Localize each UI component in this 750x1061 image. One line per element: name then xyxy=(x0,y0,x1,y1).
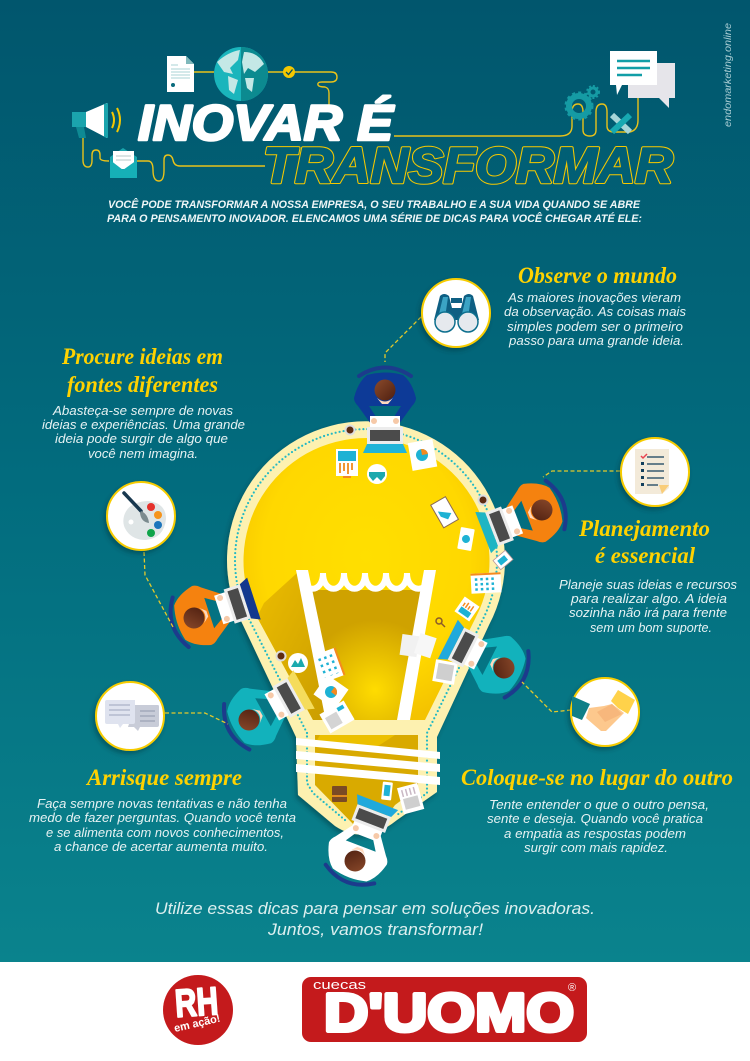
body text: passo para uma grande ideia. xyxy=(508,334,684,348)
phone bottom xyxy=(381,782,393,800)
body text xyxy=(29,797,296,854)
logo: cuecas D'UOMO: D'UOMO xyxy=(324,983,574,1043)
wallet xyxy=(332,786,347,802)
body text: Abasteça-se sempre de novas xyxy=(52,404,234,418)
body text: medo de fazer perguntas. Quando você tenta xyxy=(29,811,296,825)
person: teal right xyxy=(434,612,538,706)
closing message: Utilize essas dicas para pensar em soluções inovadoras. xyxy=(155,900,595,918)
small tablet xyxy=(493,550,513,570)
icon: globe xyxy=(214,47,268,101)
person: white bottom xyxy=(318,791,407,893)
round chart left xyxy=(288,653,308,673)
icon: envelope xyxy=(110,148,137,178)
body text: As maiores inovações vieram xyxy=(507,291,681,305)
body text: sozinha não irá para frente xyxy=(569,606,727,620)
closing message xyxy=(155,900,595,939)
body text: surgir com mais rapidez. xyxy=(524,841,668,855)
section: planejamento xyxy=(559,516,738,635)
chart document xyxy=(336,449,358,478)
connector: checklist xyxy=(543,471,620,477)
logo: RH em ação: em ação! xyxy=(173,1013,221,1035)
header wires xyxy=(83,72,638,181)
heading: Procure ideias em xyxy=(61,344,223,369)
connector: palette xyxy=(144,552,173,627)
icon: binoculars xyxy=(422,279,490,347)
coffee cup right xyxy=(478,494,488,506)
logo: cuecas D'UOMO: ® xyxy=(568,982,576,994)
vertical site credit: endomarketing.online xyxy=(723,23,734,127)
table items xyxy=(276,424,513,814)
body text: para realizar algo. A ideia xyxy=(570,592,727,606)
body text xyxy=(487,798,709,855)
phone xyxy=(457,527,475,551)
pie document xyxy=(408,439,437,471)
logo: RH em ação: RH xyxy=(174,980,220,1026)
heading: Observe o mundo xyxy=(518,263,677,288)
filament scallops xyxy=(302,573,430,589)
body text xyxy=(559,578,738,635)
tablet xyxy=(431,497,458,528)
filament interior xyxy=(308,590,424,720)
icon: check badge xyxy=(283,66,295,78)
body text: sem um bom suporte. xyxy=(590,621,712,635)
footer band xyxy=(0,962,750,1061)
lower paper right xyxy=(432,659,458,685)
body text xyxy=(504,291,687,348)
bulb outer glass xyxy=(227,421,505,835)
body text: você nem imagina. xyxy=(88,447,198,461)
filament shadow xyxy=(257,573,330,720)
dotted outline xyxy=(235,429,497,820)
heading: Arrisque sempre xyxy=(85,765,242,790)
closing message: Juntos, vamos transformar! xyxy=(267,921,483,939)
heading: é essencial xyxy=(595,543,696,568)
paper bottom xyxy=(397,783,424,814)
person: orange right xyxy=(472,473,574,562)
connector: handshake xyxy=(522,682,571,712)
icon: checklist xyxy=(621,438,689,506)
body text: Planeje suas ideias e recursos xyxy=(559,578,738,592)
body text: a empatia as respostas podem xyxy=(504,827,686,841)
intro text: VOCÊ PODE TRANSFORMAR A NOSSA EMPRESA, O SEU TRABALHO E A SUA VIDA QUANDO SE ABRE xyxy=(108,198,640,211)
heading: Coloque-se no lugar do outro xyxy=(461,765,733,790)
icon: chat bubbles xyxy=(610,51,675,108)
person: orange left xyxy=(163,569,263,654)
bulb base interior xyxy=(315,735,418,826)
body text: ideia pode surgir de algo que xyxy=(55,432,228,446)
icon: document xyxy=(167,56,194,92)
logo: RH em ação xyxy=(163,975,233,1045)
connector: binoculars xyxy=(385,317,421,362)
intro text: PARA O PENSAMENTO INOVADOR. ELENCAMOS UMA SÉRIE DE DICAS PARA VOCÊ CHEGAR ATÉ ELE: xyxy=(107,212,642,225)
body text: ideias e experiências. Uma grande xyxy=(42,418,245,432)
heading: fontes diferentes xyxy=(67,372,218,397)
section: procure ideias xyxy=(42,344,245,461)
icon: handshake xyxy=(571,678,639,746)
person: blue top xyxy=(354,368,416,453)
coffee cup left xyxy=(276,650,286,662)
swatch document xyxy=(470,572,502,594)
tilted bar document xyxy=(454,596,480,622)
coffee cup top xyxy=(344,424,356,436)
icon: palette xyxy=(107,482,175,550)
body text: a chance de acertar aumenta muito. xyxy=(54,840,268,854)
body text: Faça sempre novas tentativas e não tenha xyxy=(37,797,287,811)
heading: Planejamento xyxy=(578,516,710,541)
connector: chat xyxy=(165,713,228,724)
light bulb xyxy=(227,421,505,835)
paper left xyxy=(319,700,355,734)
body text: Tente entender o que o outro pensa, xyxy=(489,798,709,812)
person: teal left xyxy=(214,662,319,758)
section: coloque-se no lugar do outro xyxy=(461,765,733,855)
pie paper left xyxy=(313,675,349,709)
body text xyxy=(42,404,245,461)
round chart xyxy=(367,464,387,484)
bulb inner yellow xyxy=(243,438,490,720)
heading xyxy=(578,516,710,568)
section: observe o mundo xyxy=(504,263,687,348)
heading xyxy=(61,344,223,397)
open papers xyxy=(400,633,437,658)
icon: chat xyxy=(96,682,164,750)
logo: cuecas D'UOMO: cuecas xyxy=(313,977,367,992)
body text: e se alimenta com novos conhecimentos, xyxy=(46,826,284,840)
icon: gears xyxy=(566,86,599,119)
intro text xyxy=(107,198,642,225)
base stripes xyxy=(296,738,440,785)
title: Inovar é: INOVAR É xyxy=(138,95,395,151)
body text: sente e deseja. Quando você pratica xyxy=(487,812,703,826)
section: arrisque sempre xyxy=(29,765,296,854)
title: Transformar: TRANSFORMAR xyxy=(263,138,673,194)
body text: simples podem ser o primeiro xyxy=(507,320,683,334)
filament posts xyxy=(296,570,436,722)
icon: crossed tools xyxy=(612,115,630,132)
swatch document left xyxy=(313,647,345,683)
title: Transformar: TRANSFORMAR xyxy=(263,138,673,194)
body text: da observação. As coisas mais xyxy=(504,305,687,319)
icon: megaphone xyxy=(72,103,120,138)
magnifier xyxy=(436,618,445,627)
